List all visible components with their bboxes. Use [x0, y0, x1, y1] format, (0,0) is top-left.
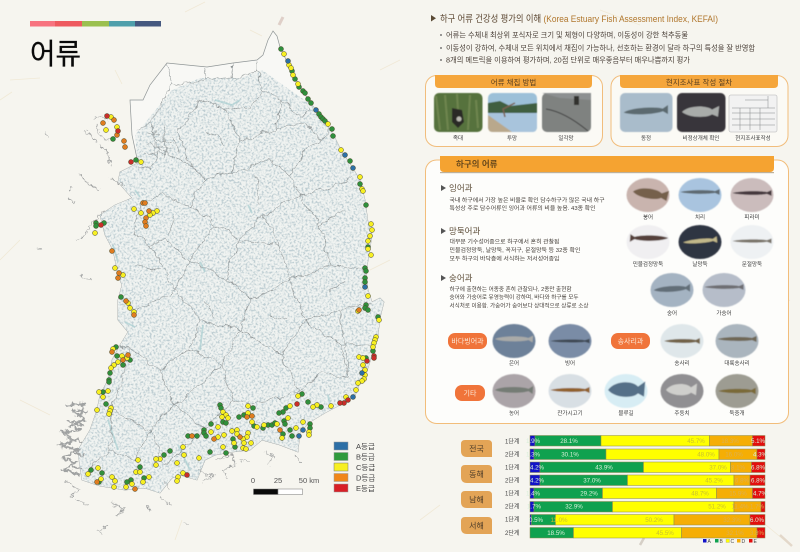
site markers: grade B — [88, 46, 380, 484]
caption: 민물검정망둑 — [633, 260, 663, 268]
caption: 문절망둑 — [742, 260, 762, 268]
text block: gobies: 대부분 기수성어종으로 하구에서 흔히 관찰됨 — [450, 238, 560, 246]
row: nationwide stage 2 — [505, 449, 768, 460]
bullet list: 8개의 메트릭을 이용하여 평가하며, 20점 단위로 매우좋음부터 매우나쁨까지 평가 — [446, 56, 690, 64]
fish: slender goby — [678, 225, 722, 259]
caption: identification: 동정 — [641, 135, 651, 142]
text block: gobies: 모두 하구의 바닥층에 서식하는 저서성어종임 — [450, 254, 560, 262]
row: west sea stage 1: 0.5% — [529, 517, 544, 524]
fish: chiri — [678, 178, 722, 212]
row: nationwide stage 2: 1.3% — [526, 452, 541, 458]
bullet list: 이동성이 강하여, 수체내 모든 위치에서 채집이 가능하나, 선호하는 환경이 달라 하구의 특성을 잘 반영함 — [446, 44, 755, 52]
bullet list — [440, 30, 755, 64]
chart legend: E — [754, 539, 758, 545]
pill: others — [455, 385, 485, 401]
section heading: KEFAI: 하구 어류 건강성 평가의 이해 (Korea Estuary Fish Assessment Index, KEFAI) — [440, 13, 718, 25]
text block: cyprinids: 국내 하구에서 가장 높은 비율로 확인 담수하구가 많은 국내 하구 — [450, 196, 605, 204]
fish: yellowfin goby — [730, 225, 774, 259]
photo: scoop net — [434, 93, 482, 132]
row: south sea stage 2: 32.9% — [565, 504, 583, 510]
fish: continental medaka — [716, 324, 758, 358]
map legend — [334, 442, 375, 493]
scale bar: 25 — [274, 476, 282, 485]
caption: scoop net: 족대 — [453, 134, 463, 142]
site markers: grade A — [286, 58, 368, 438]
caption: 날망둑 — [692, 260, 708, 268]
photo: fyke net — [542, 93, 591, 132]
row: nationwide stage 1: 28.1% — [560, 438, 578, 445]
row: south sea stage 2: 1.7% — [527, 504, 542, 510]
caption: 은어 — [509, 359, 519, 367]
row: east sea stage 2: 2단계 — [505, 476, 519, 484]
scale bar: 50 km — [299, 476, 319, 485]
row: nationwide stage 1: 18.3% — [721, 438, 739, 445]
row: west sea stage 2: 32.1% — [726, 530, 744, 537]
row: nationwide stage 2: 4.3% — [753, 452, 768, 458]
caption: 잔가시고기 — [557, 409, 583, 417]
row: nationwide stage 1: 1.9% — [526, 438, 541, 445]
map legend: D등급 — [356, 474, 375, 482]
row: east sea stage 2: 45.2% — [705, 478, 723, 484]
row: east sea stage 1: 1단계 — [505, 464, 519, 472]
caption: survey form: 현지조사표작성 — [735, 134, 771, 142]
fish: sculpin — [716, 374, 758, 408]
title: 어류 — [30, 39, 81, 71]
text block: gobies — [441, 226, 581, 262]
map legend: C등급 — [356, 463, 375, 472]
text block: mullets — [441, 273, 589, 310]
fish: medaka — [660, 324, 704, 358]
row: west sea stage 2: 45.5% — [656, 530, 674, 537]
site markers: grade E — [98, 114, 376, 478]
river network — [70, 60, 390, 500]
row: east sea stage 1: 43.9% — [595, 464, 613, 472]
scale bar: 0 — [251, 476, 255, 485]
caption: 대륙송사리 — [724, 359, 750, 367]
map legend: A등급 — [356, 442, 375, 451]
row: east sea stage 2: 4.2% — [530, 478, 545, 484]
row: west sea stage 1: 32.3% — [723, 517, 741, 524]
caption: 농어 — [509, 409, 519, 417]
row: east sea stage 1: 4.2% — [530, 464, 545, 472]
row: east sea stage 1: 8.1% — [731, 464, 746, 472]
chart legend: B — [720, 539, 724, 545]
panel header — [440, 156, 774, 173]
row: east sea stage 1: 37.0% — [709, 464, 727, 472]
caption: abnormality check: 비정상개체 확인 — [683, 134, 719, 142]
scale bar — [251, 476, 319, 494]
panel header: 하구의 어류 — [456, 159, 498, 169]
fish: pale chub — [730, 178, 774, 212]
row: east sea stage 1: 6.8% — [751, 464, 766, 472]
row: east sea stage 2: 6.8% — [751, 478, 766, 484]
row: south sea stage 2: 51.2% — [708, 504, 726, 510]
map of Korea — [38, 31, 390, 534]
chart legend: D — [742, 539, 746, 545]
chart legend — [703, 539, 758, 545]
row: west sea stage 1 — [505, 514, 765, 525]
fish: so-iuy mullet — [702, 273, 746, 307]
row: west sea stage 1: 50.2% — [645, 517, 663, 524]
map legend: B등급 — [356, 452, 375, 462]
photo: identification — [620, 93, 672, 132]
caption: 붕어 — [643, 213, 653, 221]
text block: cyprinids: 특성상 주로 담수어류인 잉어과 어류의 비율 높음. 43종 확인 — [450, 204, 596, 212]
site markers: grade D — [94, 118, 362, 492]
stacked bar chart — [505, 436, 768, 545]
row: nationwide stage 2: 48.0% — [697, 452, 715, 458]
row: west sea stage 2: 3.8% — [750, 530, 765, 537]
fish: freshwater goby — [626, 225, 670, 259]
map legend: E등급 — [356, 484, 375, 493]
fish: crucian carp — [626, 178, 670, 212]
photo: cast net — [488, 93, 537, 132]
row: south sea stage 2: 11.4% — [731, 504, 749, 510]
row: south sea stage 2: 1.7% — [750, 504, 765, 510]
fish photos and names — [448, 178, 774, 417]
text block: gobies: 민물검정망둑, 날망둑, 꼭저구, 문절망둑 등 32종 확인 — [450, 246, 581, 254]
row: south sea stage 1: 4.7% — [753, 490, 768, 498]
pill: others: 기타 — [464, 388, 477, 398]
caption: fyke net: 일각망 — [558, 134, 574, 142]
row: nationwide stage 2: 30.1% — [561, 452, 579, 458]
row: south sea stage 1 — [505, 488, 768, 498]
islands — [38, 116, 300, 534]
caption: 블루길 — [618, 409, 634, 417]
row: east sea stage 2: 37.0% — [583, 478, 601, 484]
row: south sea stage 2: 2단계 — [505, 502, 519, 510]
row: west sea stage 2 — [505, 528, 765, 538]
pill: smelts — [448, 333, 487, 349]
caption: 송사리 — [674, 359, 690, 367]
fish: bluegill — [604, 374, 648, 408]
row: south sea stage 1: 15.9% — [729, 490, 747, 498]
region tags — [461, 440, 492, 534]
row: nationwide stage 1: 5.1% — [751, 438, 766, 445]
fish: sea bass — [492, 374, 536, 408]
photo: abnormality check — [677, 93, 726, 132]
panel: fish sampling methods — [426, 75, 602, 146]
row: east sea stage 1 — [505, 462, 766, 472]
text block: mullets: 서식처로 이용함. 가숭어가 숭어보다 상대적으로 상류로 소상 — [450, 302, 589, 310]
row: east sea stage 2 — [505, 475, 766, 486]
row: south sea stage 1: 1단계 — [505, 490, 519, 498]
tag: east sea: 동해 — [469, 469, 484, 479]
panel: field survey procedure: 현지조사표 작성 절차 — [666, 77, 732, 87]
row: west sea stage 1: 1단계 — [505, 516, 519, 524]
panel: field survey procedure — [611, 75, 788, 146]
caption: 주둥치 — [674, 409, 690, 417]
fish: stickleback — [548, 374, 592, 408]
site markers: grade C — [86, 52, 382, 490]
text block: mullets: 숭어와 가숭어로 유영능력이 강하며, 바다와 하구를 모두 — [450, 293, 579, 301]
caption: 피라미 — [744, 213, 760, 221]
fish: sweetfish — [492, 324, 536, 358]
row: nationwide stage 2: 16.0% — [725, 452, 743, 458]
caption: cast net: 투망 — [507, 135, 517, 142]
photo: survey form — [729, 95, 777, 132]
row: south sea stage 1: 29.2% — [580, 490, 598, 498]
panel header — [435, 75, 592, 88]
caption: 숭어 — [667, 309, 677, 317]
tag: south sea: 남해 — [469, 494, 484, 504]
text block: cyprinids: 잉어과 — [449, 183, 473, 193]
row: nationwide stage 1: 1단계 — [505, 438, 519, 446]
text block: mullets: 숭어과 — [449, 273, 473, 283]
row: south sea stage 1: 48.7% — [691, 490, 709, 498]
caption: 가숭어 — [716, 309, 732, 317]
tag: west sea: 서해 — [469, 520, 484, 530]
district boundaries — [90, 60, 372, 470]
caption: 치리 — [695, 213, 705, 221]
bullet list: 어류는 수체내 최상위 포식자로 크기 및 체형이 다양하며, 이동성이 강한 척추동물 — [446, 30, 688, 40]
panel: estuary fish — [426, 156, 788, 424]
chart legend: C — [730, 539, 734, 545]
caption: 빙어 — [565, 359, 575, 367]
tag: nationwide: 전국 — [469, 444, 484, 454]
pill: medakas: 송사리과 — [618, 336, 644, 346]
row: nationwide stage 2: 2단계 — [505, 450, 519, 458]
waterways — [108, 100, 330, 470]
text block: gobies: 망둑어과 — [449, 226, 480, 236]
fish: smelt — [548, 324, 592, 358]
fish: mullet — [650, 273, 694, 307]
row: south sea stage 2 — [505, 502, 765, 512]
pill: smelts: 바다빙어과 — [451, 336, 484, 346]
land outline — [78, 31, 384, 493]
chart legend: A — [708, 539, 712, 545]
pill: medakas — [611, 333, 650, 349]
colour title bar — [30, 21, 161, 26]
row: west sea stage 2: 2단계 — [505, 529, 519, 537]
text block: cyprinids — [441, 183, 605, 212]
text block: mullets: 하구에 출현하는 어종중 흔히 관찰되나, 2종만 출현함 — [450, 285, 572, 293]
caption: 둑중개 — [729, 409, 745, 417]
row: west sea stage 2: 18.5% — [547, 530, 565, 537]
row: west sea stage 1: 6.0% — [750, 517, 765, 524]
panel: fish sampling methods: 어류 채집 방법 — [491, 77, 536, 87]
panel header — [620, 75, 778, 88]
row: east sea stage 2: 6.8% — [735, 478, 750, 484]
row: nationwide stage 1: 45.7% — [687, 438, 705, 445]
row: nationwide stage 1 — [505, 436, 766, 446]
row: south sea stage 1: 1.4% — [526, 490, 541, 498]
fish: ponyfish — [660, 374, 704, 408]
row: west sea stage 1: 11.0% — [550, 517, 568, 524]
